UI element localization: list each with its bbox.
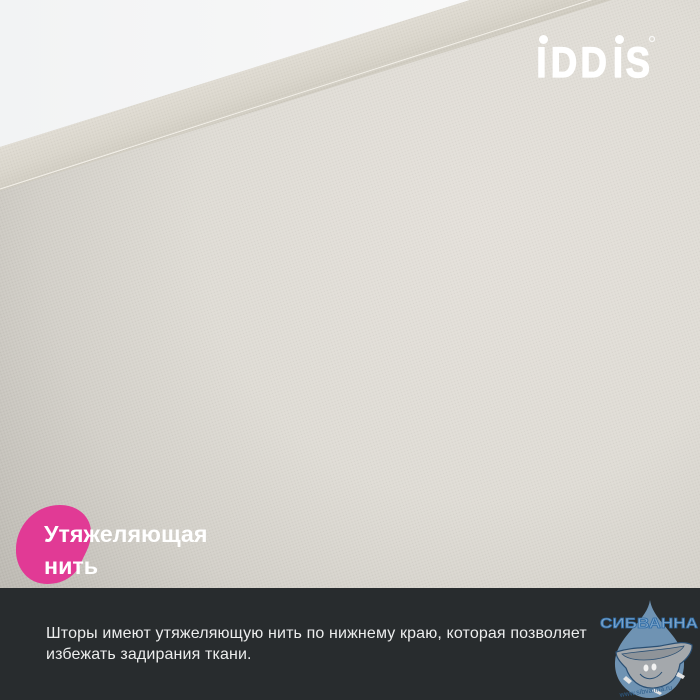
dark caption band bbox=[0, 588, 700, 700]
heading: нить bbox=[44, 553, 98, 579]
heading: Утяжеляющая bbox=[44, 521, 207, 547]
heading bbox=[44, 521, 207, 579]
logo: iDDiS: IDDIS bbox=[536, 39, 650, 87]
body text: избежать задирания ткани. bbox=[46, 646, 252, 663]
body text bbox=[46, 625, 587, 663]
watermark url: www.sibvanna.ru bbox=[618, 685, 673, 699]
icon: water drop bbox=[615, 600, 684, 698]
body text: Шторы имеют утяжеляющую нить по нижнему краю, которая позволяет bbox=[46, 625, 587, 642]
icon: bathtub bbox=[616, 643, 692, 695]
watermark name: СИБВАННА bbox=[600, 615, 698, 632]
